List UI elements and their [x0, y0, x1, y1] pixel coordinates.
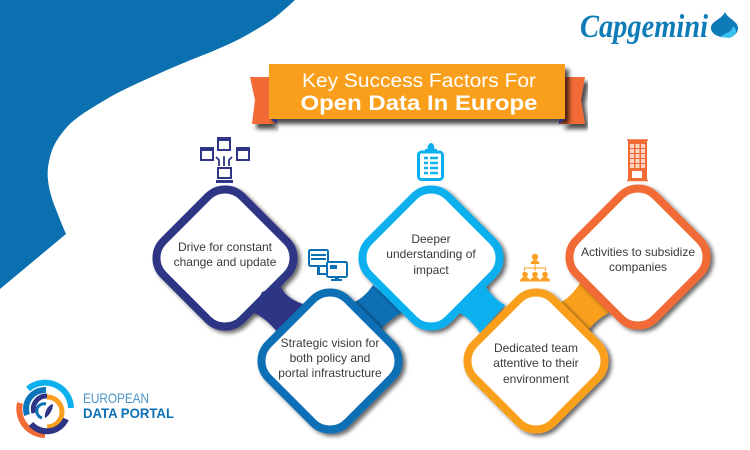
- text: deeper understanding: Deeper: [411, 232, 451, 246]
- European wordmark: EUROPEAN: [83, 390, 149, 406]
- diamond frame: subsidize companies: [560, 179, 716, 335]
- icon: office building: [627, 140, 648, 180]
- text: strategic vision: portal infrastructure: [278, 366, 382, 380]
- banner main panel: [269, 64, 565, 119]
- icon: organisation chart: [520, 254, 550, 282]
- diamond frame: strategic vision: [252, 283, 408, 439]
- spade highlight: [720, 26, 736, 38]
- text: dedicated team: attentive to their: [493, 356, 579, 370]
- spade mark: [711, 12, 738, 37]
- text: deeper understanding: impact: [413, 263, 449, 277]
- connector: blue: [353, 285, 403, 332]
- logo: European Data Portal: [19, 383, 174, 435]
- connector: navy: [252, 285, 303, 333]
- diamond frame: deeper understanding: [353, 180, 509, 336]
- icon: monitors: [309, 250, 347, 281]
- text: strategic vision: Strategic vision for: [281, 336, 379, 350]
- banner fold left: [271, 119, 277, 124]
- title banner: [250, 64, 585, 124]
- banner left ribbon: [250, 77, 276, 124]
- connector: amber: [560, 283, 610, 332]
- text: dedicated team: Dedicated team: [494, 341, 578, 355]
- icon: clipboard: [418, 143, 442, 180]
- text: subsidize companies: companies: [609, 260, 667, 274]
- text: dedicated team: environment: [503, 372, 570, 386]
- banner right ribbon: [559, 77, 585, 124]
- text: drive for constant change: change and update: [174, 255, 277, 269]
- diamond frame: drive for constant change: [147, 180, 303, 336]
- banner fold right: [559, 119, 565, 124]
- banner title line 2: Open Data In Europe: [300, 92, 538, 115]
- text: strategic vision: both policy and: [290, 351, 370, 365]
- logo: Capgemini: [580, 9, 738, 45]
- text: drive for constant change: Drive for constant: [178, 240, 273, 254]
- text: deeper understanding: understanding of: [386, 247, 476, 261]
- connector: light blue: [458, 285, 505, 333]
- Capgemini wordmark: Capgemini: [580, 9, 709, 45]
- Data Portal wordmark: DATA PORTAL: [83, 405, 174, 421]
- diamond frame: dedicated team: [458, 283, 614, 439]
- text: subsidize companies: Activities to subsidize: [581, 245, 695, 259]
- portal mark: [19, 383, 71, 435]
- background blue wave: [0, 0, 295, 289]
- banner title line 1: Key Success Factors For: [302, 71, 537, 92]
- icon: connected windows: [201, 137, 249, 183]
